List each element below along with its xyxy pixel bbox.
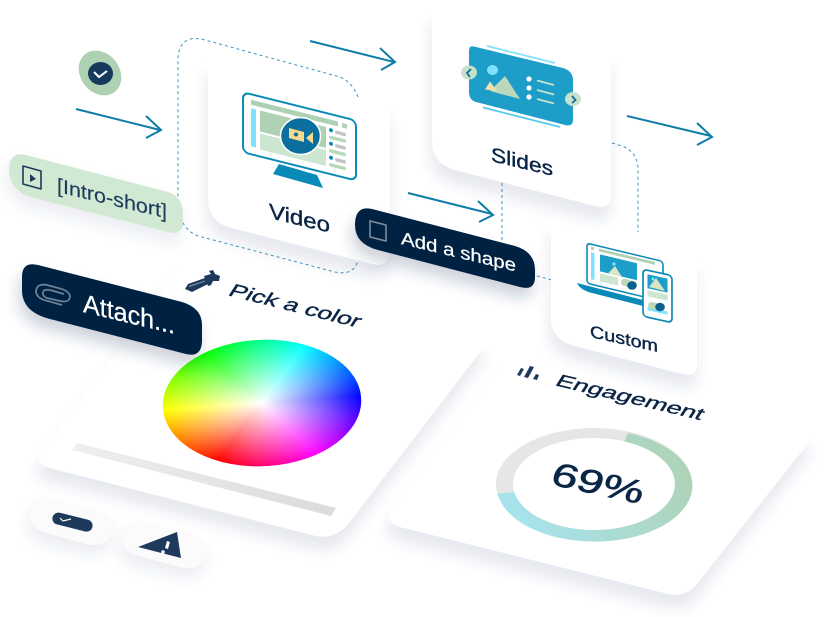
- chart: color wheel: [156, 333, 368, 473]
- label: custom: Custom: [590, 321, 658, 356]
- card: slides: [432, 10, 611, 207]
- arrow 3: [408, 193, 493, 222]
- badge: warning: [123, 521, 206, 568]
- value: 69%: 69%: [547, 456, 650, 511]
- panel: pick a color: [39, 267, 487, 537]
- label: slides: Slides: [491, 144, 553, 181]
- badge: toggle check: [31, 497, 113, 545]
- arrow 1: [76, 109, 161, 138]
- label: attach: Attach...: [83, 288, 175, 340]
- slider bar: [72, 443, 336, 516]
- pill: attach: [22, 264, 202, 355]
- dashed connectors: [178, 38, 638, 280]
- icon: monitor: [243, 92, 356, 188]
- icon: eyedropper: [185, 270, 220, 292]
- icon: bars: [517, 366, 539, 380]
- pill: add a shape: [355, 208, 535, 288]
- panel: engagement: [389, 360, 813, 595]
- label: intro-short: [Intro-short]: [57, 175, 167, 223]
- icon: square: [370, 221, 386, 241]
- icon: paperclip: [36, 285, 70, 305]
- arrow 2: [310, 41, 395, 70]
- icon: check badge: [70, 42, 130, 104]
- heading: engagement: Engagement: [551, 371, 709, 424]
- label: add a shape: Add a shape: [401, 227, 516, 276]
- chart: gauge ring: [496, 428, 692, 542]
- arrow 4: [627, 116, 712, 145]
- icon: slides: [461, 46, 581, 127]
- card: video: [208, 60, 390, 265]
- heading: pick a color: Pick a color: [224, 281, 366, 332]
- card: custom: [551, 222, 697, 375]
- icon: devices: [577, 243, 672, 323]
- icon: play: [23, 166, 41, 189]
- label: video: Video: [269, 199, 330, 238]
- pill: intro-short: [9, 154, 183, 233]
